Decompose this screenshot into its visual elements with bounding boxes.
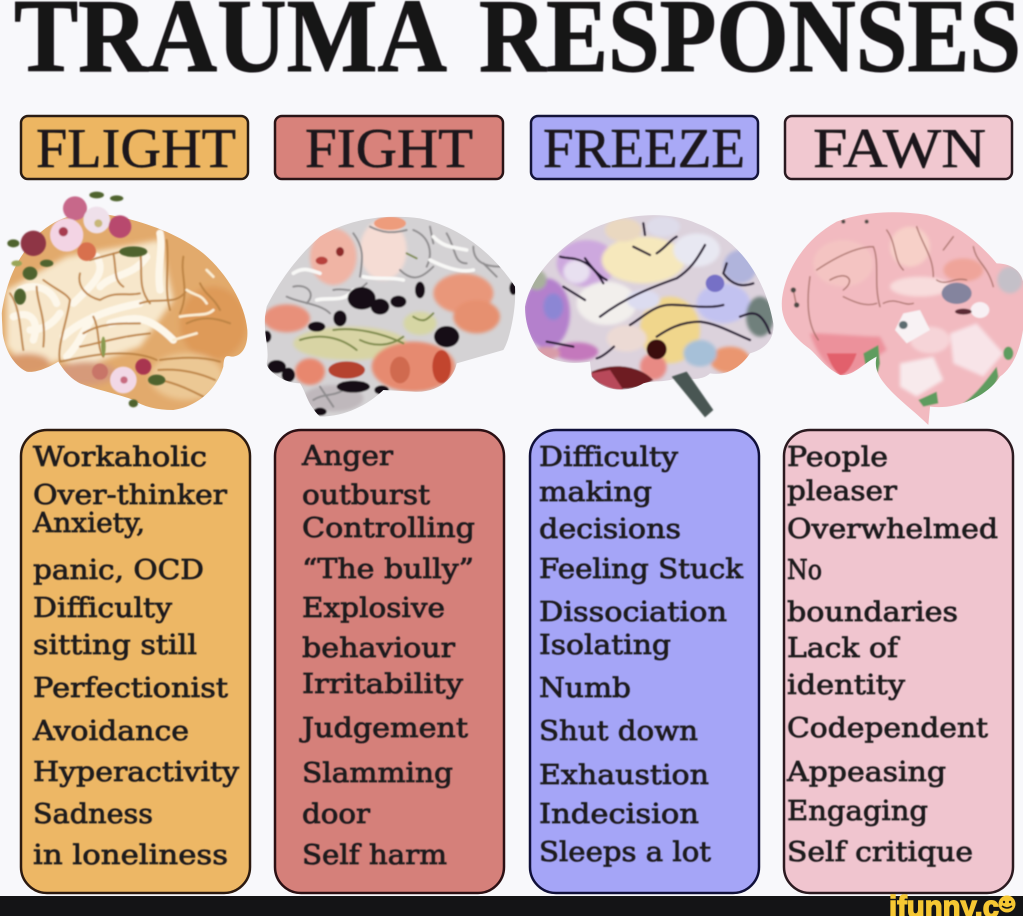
text block: fight traits: Anger [301, 441, 393, 472]
text block: fight traits: Self harm [302, 840, 447, 871]
text block: freeze traits: Isolating [539, 630, 671, 661]
text block: flight traits: Avoidance [32, 716, 189, 747]
text block: fight traits: Explosive [302, 593, 445, 624]
text block: freeze traits: Shut down [539, 716, 698, 747]
text block: freeze traits: Exhaustion [539, 760, 709, 791]
text block: freeze traits: decisions [539, 514, 681, 545]
text block: flight traits: Over-thinker [33, 480, 227, 511]
footer bar [0, 896, 1023, 916]
text block: fight traits: outburst [302, 480, 430, 511]
text block: fight traits: “The bully” [302, 554, 474, 585]
panel: flight list [21, 430, 250, 893]
panel: freeze header: FREEZE [543, 118, 745, 180]
text block: flight traits: panic, OCD [33, 555, 204, 586]
text block: fight traits: Irritability [302, 669, 464, 700]
text block: flight traits: Perfectionist [33, 673, 228, 704]
text block: fawn traits: Lack of [787, 633, 900, 664]
text block: flight traits: Workaholic [33, 442, 207, 473]
text block: fawn traits: People [787, 442, 888, 473]
brain stem [672, 372, 713, 417]
text block: fawn traits: Engaging [787, 796, 928, 827]
text block: flight traits [32, 442, 240, 871]
text block: fawn traits: Overwhelmed [787, 514, 998, 545]
panel: fawn header [785, 116, 1012, 180]
text block: fight traits: behaviour [302, 633, 455, 664]
text block: fight traits: door [302, 799, 370, 830]
icon: grey and salmon floral brain [264, 216, 516, 416]
text block: fawn traits [786, 442, 998, 868]
panel: fight list [275, 430, 504, 893]
text block: freeze traits: Indecision [539, 799, 699, 830]
panel: fawn list [784, 430, 1013, 893]
text block: fight traits: Controlling [302, 513, 475, 544]
panel: flight header: FLIGHT [36, 118, 236, 180]
text block: flight traits: in loneliness [33, 840, 228, 871]
text block: freeze traits: Numb [539, 673, 631, 704]
text block: flight traits: Hyperactivity [33, 757, 240, 788]
text block: flight traits: Sadness [33, 799, 153, 830]
text block: fight traits: Judgement [299, 713, 468, 744]
icon: multicolour stained glass brain [520, 207, 780, 417]
panel: fawn header: FAWN [813, 118, 986, 180]
text block: freeze traits: making [539, 477, 652, 508]
text block: fight traits: Slamming [302, 758, 453, 789]
icon: floral orange brain [0, 192, 253, 413]
title [14, 0, 1021, 94]
text block: fawn traits: No [787, 555, 822, 586]
text block: freeze traits: Feeling Stuck [539, 554, 744, 585]
text block: fight traits [299, 441, 475, 871]
text block: fawn traits: boundaries [787, 597, 958, 628]
text block: freeze traits [539, 442, 744, 868]
icon: pink floral brain [777, 207, 1023, 430]
text block: freeze traits: Dissociation [539, 597, 727, 628]
text block: fawn traits: pleaser [787, 476, 897, 507]
panel: freeze list [530, 430, 759, 893]
text block: flight traits: sitting still [33, 630, 197, 661]
text block: freeze traits: Sleeps a lot [539, 837, 711, 868]
text block: fawn traits: Codependent [787, 713, 988, 744]
text block: freeze traits: Difficulty [539, 442, 679, 473]
text block: flight traits: Difficulty [33, 593, 173, 624]
panel: fight header: FIGHT [305, 118, 473, 180]
text block: flight traits: Anxiety, [32, 508, 145, 539]
text block: fawn traits: identity [787, 670, 906, 701]
text block: fawn traits: Self critique [787, 837, 973, 868]
text block: fawn traits: Appeasing [786, 757, 946, 788]
